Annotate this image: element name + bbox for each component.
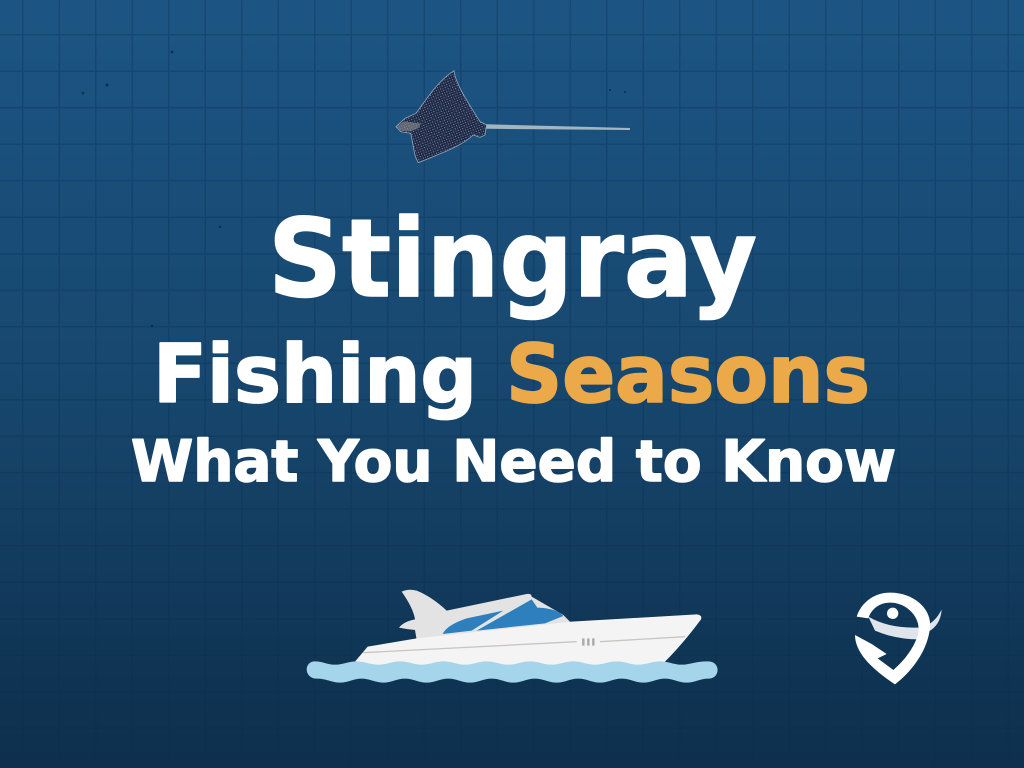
ray head highlight — [397, 121, 421, 131]
icon: spotted eagle ray — [393, 67, 630, 165]
logo hook body — [855, 593, 930, 684]
ray body — [396, 71, 487, 163]
windshield — [477, 599, 563, 631]
subtitle: What You Need to Know — [131, 429, 896, 495]
hull stripe — [363, 637, 685, 653]
heading word: Fishing: Fishing — [153, 328, 477, 421]
logo band and tail — [868, 609, 942, 639]
heading word: Seasons: Seasons — [506, 328, 870, 421]
logo: fish hook mark — [855, 593, 942, 684]
logo eye — [887, 608, 898, 619]
waves — [307, 661, 718, 683]
ray tail — [477, 124, 630, 130]
heading: Fishing Seasons — [153, 328, 870, 421]
side window — [443, 611, 503, 634]
ray speckles — [396, 72, 486, 162]
yacht windows — [443, 599, 563, 634]
icon: motor yacht on waves — [307, 590, 718, 683]
title: Stingray: Stingray — [268, 197, 757, 322]
hull vents — [583, 638, 593, 646]
yacht superstructure — [399, 590, 572, 640]
yacht hull — [350, 614, 701, 672]
